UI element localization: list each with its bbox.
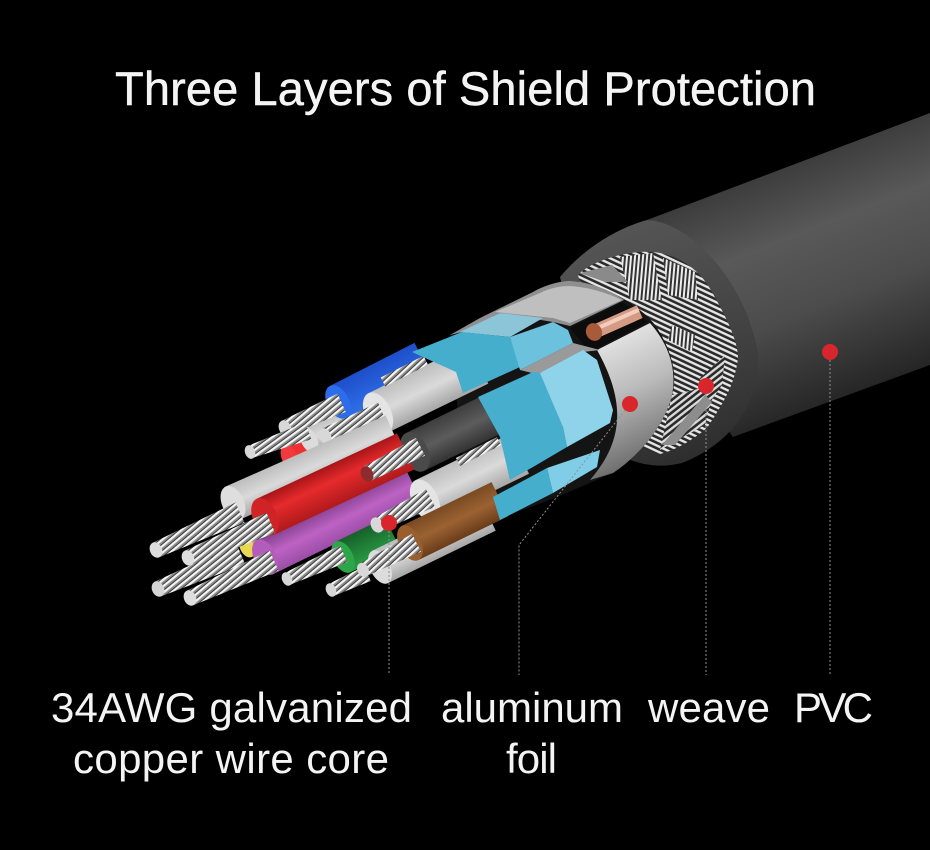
wire: green (327, 518, 400, 577)
PVC outer jacket (560, 113, 930, 466)
strand: gray wire conductor 2 (357, 438, 425, 486)
label: copper wire core: copper wire core (73, 735, 389, 782)
strand: upper white conductor (316, 403, 386, 448)
strand: lower white conductor (323, 566, 371, 599)
strand: brown wire conductor (354, 534, 421, 581)
wire: purple (247, 468, 422, 579)
label: aluminum foil (441, 684, 623, 782)
marker: weave (698, 378, 714, 394)
label: PVC: PVC (794, 684, 873, 731)
wire: blue (320, 343, 431, 423)
wire: red (246, 433, 414, 540)
strand: gray wire conductor 1 (146, 503, 245, 562)
strand: green wire conductor (279, 546, 347, 589)
wire: dark gray (394, 385, 523, 477)
label: copper wire core (51, 684, 412, 782)
strand: conductor between gray and white (456, 437, 501, 466)
strand: middle white conductor (367, 489, 435, 537)
aluminum foil tube (450, 281, 674, 530)
blue foil wrap: middle pair (478, 350, 613, 480)
wire: lower white (363, 498, 496, 588)
wire: back silver strand (235, 464, 284, 495)
strand: red wire conductor (178, 513, 275, 570)
strand: blue wire conductor (275, 394, 346, 440)
blue foil wrap: lower pair (493, 450, 600, 520)
wire: brown (392, 482, 508, 565)
strand: small white wire conductor (242, 422, 311, 462)
wire: long light gray (216, 415, 400, 524)
label: aluminum foil: aluminum (441, 684, 623, 731)
wire: yellow (236, 524, 279, 560)
copper ground wire (583, 303, 643, 343)
wire: upper white (357, 344, 488, 438)
label: aluminum foil: foil (506, 735, 557, 782)
title: Three Layers of Shield Protection (115, 62, 816, 115)
label: weave: weave (647, 684, 770, 731)
wire: middle white (404, 434, 529, 525)
wire: small white (296, 405, 360, 456)
strand: lower conductor 3 (148, 544, 245, 601)
blue foil wrap: upper pair (412, 313, 573, 393)
strand: purple wire conductor (180, 551, 279, 610)
label: copper wire core: 34AWG galvanized (51, 684, 412, 731)
strand: rear conductor above upper white (381, 356, 428, 386)
wire: small red (277, 402, 386, 474)
marker: aluminum foil (622, 396, 638, 412)
marker: PVC (822, 344, 838, 360)
cable illustration (146, 113, 930, 610)
marker: copper wire core (381, 515, 397, 531)
metal weave shield (578, 252, 738, 454)
callout leader lines (389, 352, 830, 675)
